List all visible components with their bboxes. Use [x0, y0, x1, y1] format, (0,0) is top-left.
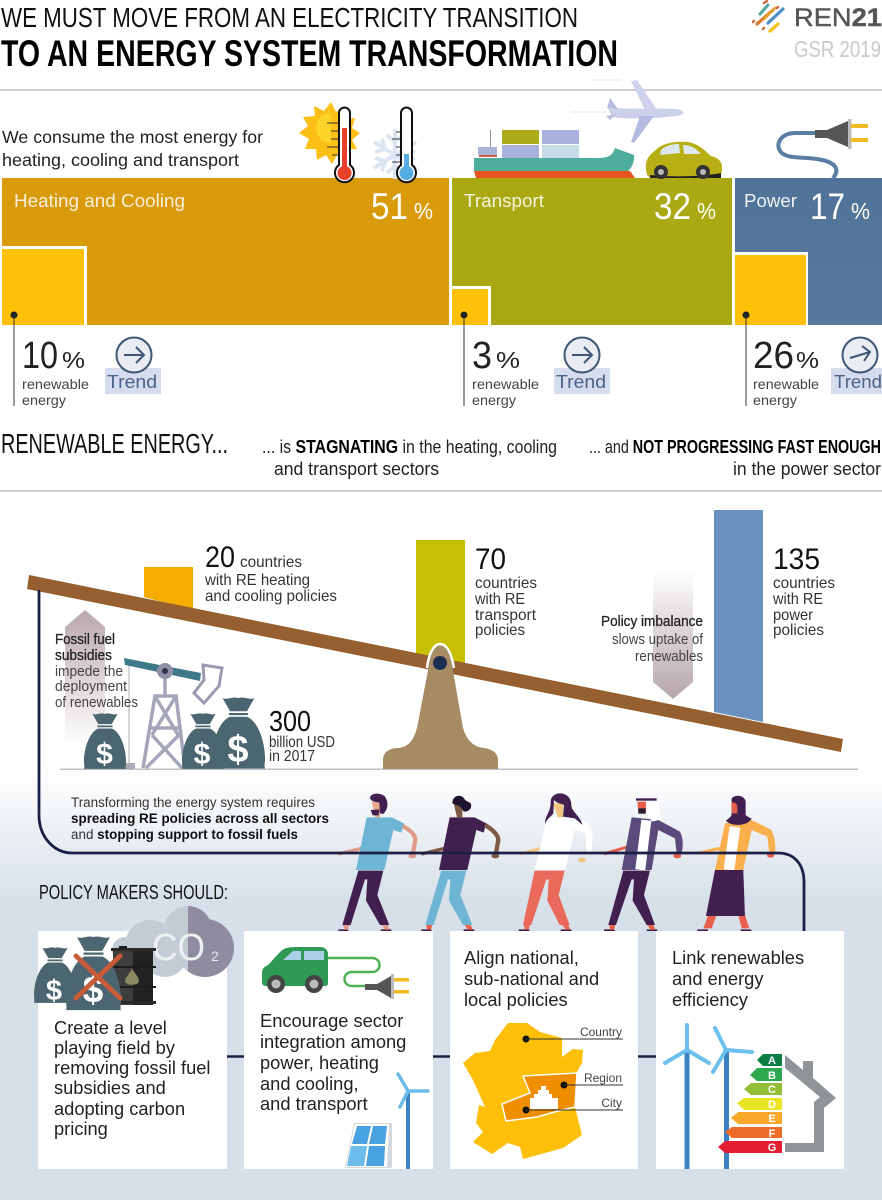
icon: money bag three [212, 697, 265, 771]
card: link renewables: and energy [672, 968, 764, 989]
label: 135 countries: power [773, 607, 814, 624]
trend: power [831, 338, 882, 394]
figure: person one [338, 794, 416, 931]
heading: renewable energy: RENEWABLE ENERGY... [1, 428, 228, 459]
stat: heating 10% renewable: energy [22, 392, 66, 408]
panel: transport: Transport [464, 191, 544, 211]
text: fossil fuel subsidies: deployment [55, 678, 128, 695]
panel: heating and cooling [0, 178, 449, 325]
icon: wind turbines [665, 1025, 752, 1169]
panel: power: Power [744, 191, 797, 211]
label: 70 countries: 70 [475, 543, 506, 576]
icon: solar panel [345, 1123, 392, 1168]
stat: transport 3% renewable: energy [472, 392, 516, 408]
panel: transport [452, 178, 732, 325]
icon: energy rating house: B [768, 1070, 776, 1082]
stat: power 26% renewable: 26 [753, 335, 794, 377]
card: sector integration: and cooling, [260, 1073, 359, 1094]
label: 135 countries: with RE [772, 591, 823, 608]
bar: transport policies [416, 540, 465, 665]
card: link renewables [656, 931, 844, 1169]
stat: transport 3% renewable [460, 312, 539, 408]
text: transforming the energy system [71, 795, 329, 842]
card: align policies: local policies [464, 989, 568, 1010]
icon: energy rating house [718, 1054, 836, 1154]
stat: heating 10% renewable: % [62, 347, 85, 373]
icon: oil pump [124, 658, 222, 769]
icon: energy rating house: A [768, 1055, 776, 1067]
icon: money bag two [182, 713, 224, 771]
label: 20 countries: and cooling policies [205, 588, 337, 605]
connector: navy policy line [39, 590, 804, 931]
panel: heating and cooling: % [414, 198, 433, 224]
text: transforming the energy system: and stopping support to fossil fuels [71, 827, 298, 842]
icon: money bag two: $ [194, 738, 211, 771]
bar: heating and cooling policies [144, 567, 193, 610]
icon: wind turbine small [398, 1074, 428, 1169]
trend: power: Trend [834, 372, 882, 392]
icon: crossed money bags [34, 936, 121, 1010]
icon: country region city map [463, 1023, 623, 1159]
label: 70 countries: countries [475, 575, 537, 592]
icon: co2 cloud [112, 906, 234, 977]
figure: person three [519, 793, 593, 931]
bar: power policies [714, 510, 763, 722]
heading: policy makers should: POLICY MAKERS SHOULD: [39, 882, 228, 904]
card: align policies: sub-national and [464, 968, 599, 989]
icon: crossed money bags: $ [83, 969, 104, 1010]
panel: power: 17 [810, 186, 845, 227]
text: policy imbalance: renewables [635, 648, 703, 665]
card: level playing field: removing fossil fuel [54, 1057, 210, 1078]
label: 135 countries: countries [773, 575, 835, 592]
text: policy imbalance: Policy imbalance [601, 613, 703, 630]
label: 20 countries [204, 541, 337, 605]
icon: country region city map: Country [580, 1025, 622, 1039]
card: sector integration: integration among [260, 1031, 406, 1052]
label: 300 billion USD [269, 706, 335, 765]
trend: heating: Trend [107, 372, 157, 392]
title: WE MUST MOVE FROM AN ELECTRICITY TRANSITION [1, 2, 578, 33]
text: not progressing [589, 437, 881, 479]
icon: co2 cloud: CO [152, 927, 205, 969]
label: 20 countries: countries [240, 554, 302, 571]
logo: REN21 GSR 2019: REN21 [794, 4, 882, 32]
card: sector integration [244, 931, 433, 1169]
icon: money bag one: $ [96, 738, 113, 771]
icon: green electric car [262, 947, 409, 999]
panel: power [735, 178, 882, 325]
text: fossil fuel subsidies: impede the [55, 663, 123, 680]
trend: heating [105, 338, 161, 394]
arrow: fossil fuel subsidies up [65, 610, 105, 745]
card: align policies [450, 931, 638, 1169]
intro text: We consume the most energy for [2, 127, 263, 147]
icon: money bag three: $ [227, 729, 249, 771]
stat: heating 10% renewable: 10 [22, 335, 58, 377]
card: level playing field: subsidies and [54, 1077, 166, 1098]
text: not progressing: in the power sector [733, 459, 881, 479]
panel: transport: % [697, 198, 716, 224]
text: policy imbalance [601, 613, 704, 665]
title: TO AN ENERGY SYSTEM TRANSFORMATION [1, 33, 618, 74]
stat: heating 10% renewable [10, 312, 89, 408]
figure: person five [697, 796, 775, 931]
icon: country region city map: City [601, 1096, 622, 1110]
icon: power plug [778, 119, 868, 178]
label: 300 billion USD: in 2017 [269, 748, 315, 765]
stat: heating 10% renewable: renewable [22, 376, 89, 392]
label: 70 countries [474, 543, 537, 639]
label: 20 countries: 20 [205, 541, 235, 574]
panel: power: % [851, 198, 870, 224]
figure: person two [421, 796, 499, 931]
stat: power 26% renewable: renewable [753, 376, 819, 392]
label: 135 countries: 135 [773, 543, 820, 576]
icon: money bag one [84, 713, 126, 771]
icon: oil barrel [111, 946, 156, 1005]
icon: energy rating house: C [768, 1084, 776, 1096]
seesaw beam [27, 575, 843, 752]
icon: crossed money bags: $ [46, 975, 62, 1007]
trend: transport [554, 338, 610, 394]
connectors between cards [227, 1055, 656, 1058]
label: 70 countries: transport [475, 607, 537, 624]
trend: transport: Trend [556, 372, 606, 392]
figure: person four [604, 798, 683, 931]
text: policy imbalance: slows uptake of [612, 631, 704, 648]
card: align policies: Align national, [464, 947, 579, 968]
card: level playing field: adopting carbon [54, 1098, 185, 1119]
label: 300 billion USD: 300 [269, 706, 311, 738]
label: 20 countries: with RE heating [204, 572, 310, 589]
icon: yellow car [646, 142, 722, 179]
intro text [2, 127, 263, 170]
icon: aeroplane [571, 80, 684, 143]
card: link renewables: efficiency [672, 989, 749, 1010]
panel: heating and cooling: Heating and Cooling [14, 191, 185, 211]
logo: REN21 GSR 2019 [753, 1, 882, 62]
icon: energy rating house: G [768, 1142, 776, 1154]
intro text: heating, cooling and transport [2, 150, 239, 170]
card: sector integration: power, heating [260, 1052, 379, 1073]
icon: energy rating house: F [769, 1128, 776, 1140]
label: 135 countries [772, 543, 835, 639]
title [1, 2, 618, 74]
label: 70 countries: policies [475, 622, 525, 639]
text: transforming the energy system: Transforming the energy system requires [71, 795, 315, 810]
label: 135 countries: policies [773, 622, 824, 639]
card: level playing field [38, 931, 227, 1169]
text: stagnating [262, 437, 557, 479]
text: fossil fuel subsidies: Fossil fuel [55, 631, 115, 648]
icon: snowflake and cold thermometer [374, 108, 416, 182]
stat: transport 3% renewable: 3 [472, 335, 492, 377]
text: transforming the energy system: spreading RE policies across all sectors [71, 811, 329, 826]
icon: sun and hot thermometer [299, 102, 360, 182]
stat: transport 3% renewable: renewable [472, 376, 539, 392]
icon: energy rating house: E [768, 1113, 776, 1125]
card: level playing field: pricing [54, 1118, 108, 1139]
label: 300 billion USD: billion USD [269, 734, 335, 751]
text: stagnating: ... is STAGNATING in the heating, cooling [262, 437, 557, 457]
icon: co2 cloud: 2 [211, 948, 219, 964]
panel: heating and cooling: 51 [371, 186, 408, 227]
card: link renewables: Link renewables [672, 947, 804, 968]
panel: transport: 32 [654, 186, 691, 227]
seesaw fulcrum [383, 644, 498, 769]
stat: transport 3% renewable: % [496, 347, 520, 373]
card: sector integration: Encourage sector [260, 1010, 403, 1031]
text: fossil fuel subsidies: subsidies [55, 647, 112, 664]
card: sector integration: and transport [260, 1093, 368, 1114]
card: level playing field: playing field by [54, 1037, 176, 1058]
icon: country region city map: Region [584, 1071, 622, 1085]
stat: power 26% renewable [742, 312, 819, 408]
text: stagnating: and transport sectors [274, 459, 439, 479]
card: level playing field: Create a level [54, 1017, 167, 1038]
label: 70 countries: with RE [474, 591, 525, 608]
stat: power 26% renewable: energy [753, 392, 797, 408]
arrow: policy imbalance down [653, 570, 693, 699]
text: fossil fuel subsidies [55, 631, 138, 711]
stat: power 26% renewable: % [796, 347, 819, 373]
icon: container ship [474, 130, 635, 178]
text: fossil fuel subsidies: of renewables [55, 694, 138, 711]
icon: energy rating house: D [768, 1099, 776, 1111]
